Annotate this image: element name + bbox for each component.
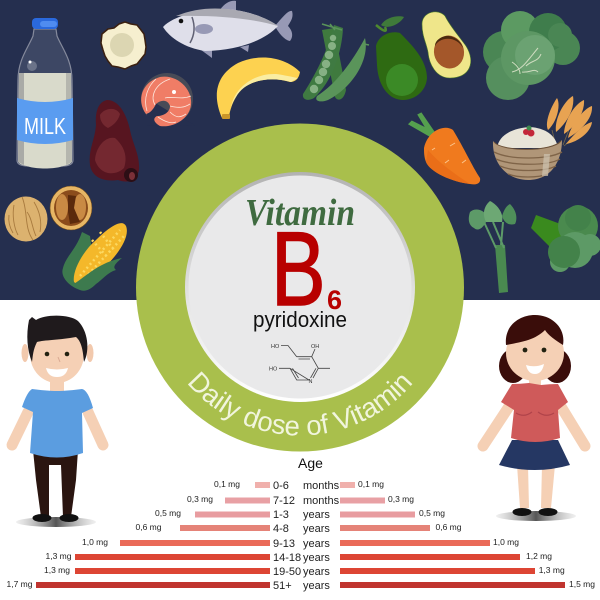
age labels <box>273 480 340 592</box>
icon: celery <box>469 201 516 293</box>
female dose labels: 1,0 mg <box>493 537 519 547</box>
icon: bowl and wheat <box>493 96 592 180</box>
male dose labels <box>6 479 240 589</box>
title: subscript 6: 6 <box>327 285 342 315</box>
age labels: 19-50 <box>273 566 301 578</box>
age labels: years <box>303 523 330 535</box>
icon: cabbage <box>483 11 580 100</box>
female dose labels: 1,2 mg <box>526 551 552 561</box>
panel: navy food background <box>0 0 600 300</box>
icon: fish <box>163 1 293 58</box>
female dose labels <box>358 479 595 589</box>
chart: molecule structure: OH <box>311 344 319 350</box>
title: B: B <box>271 210 326 327</box>
chart: molecule structure: HO <box>269 366 278 372</box>
male dose labels: 1,3 mg <box>44 565 70 575</box>
age labels: years <box>303 538 330 550</box>
icon: liver <box>90 100 139 182</box>
female dose labels: 1,3 mg <box>539 565 565 575</box>
icon: banana <box>217 57 300 119</box>
figure: man <box>12 316 103 527</box>
female bars <box>340 482 565 588</box>
age labels: 7-12 <box>273 495 295 507</box>
age labels: years <box>303 552 330 564</box>
male dose labels: 0,5 mg <box>155 508 181 518</box>
chart: molecule structure <box>269 344 330 385</box>
text: pyridoxine: pyridoxine <box>253 307 347 332</box>
age labels: years <box>303 580 330 592</box>
green ring <box>136 124 464 452</box>
inner disc <box>185 172 415 402</box>
chart: daily dose bars by age <box>6 455 595 592</box>
age labels: years <box>303 566 330 578</box>
age labels: 4-8 <box>273 523 289 535</box>
chart: molecule structure: N <box>308 379 312 385</box>
chart: molecule structure: HO <box>271 344 280 350</box>
age labels: 51+ <box>273 580 292 592</box>
female dose labels: 0,6 mg <box>436 522 462 532</box>
icon: milk bottle <box>17 18 73 168</box>
heading: age: Age <box>298 455 323 471</box>
female dose labels: 0,5 mg <box>419 508 445 518</box>
male dose labels: 0,1 mg <box>214 479 240 489</box>
male dose labels: 0,6 mg <box>136 522 162 532</box>
title: Vitamin: Vitamin <box>245 192 355 234</box>
age labels: 0-6 <box>273 480 289 492</box>
female dose labels: 0,3 mg <box>388 494 414 504</box>
icon: corn <box>62 223 127 291</box>
icon: peas <box>303 24 369 101</box>
figure: woman <box>483 315 585 521</box>
icon: avocado whole <box>376 16 427 100</box>
age labels: 1-3 <box>273 509 289 521</box>
icon: avocado half <box>422 12 471 78</box>
icon: carrot <box>410 114 480 184</box>
icon: salmon steak <box>141 73 195 127</box>
age labels: months <box>303 495 340 507</box>
icon: broccoli <box>531 205 600 272</box>
male bars <box>36 482 270 588</box>
icon: milk bottle: MILK <box>24 113 67 139</box>
age labels: months <box>303 480 340 492</box>
heading: daily dose on ring: Daily dose of Vitamin <box>188 371 412 436</box>
female dose labels: 0,1 mg <box>358 479 384 489</box>
icon: oyster <box>101 22 146 69</box>
panel: vitamin circle <box>136 124 464 452</box>
age labels: years <box>303 509 330 521</box>
male dose labels: 1,7 mg <box>6 579 33 589</box>
icon: walnuts <box>4 186 92 242</box>
male dose labels: 1,3 mg <box>46 551 72 561</box>
age labels: 9-13 <box>273 538 295 550</box>
female dose labels: 1,5 mg <box>569 579 595 589</box>
age labels: 14-18 <box>273 552 301 564</box>
male dose labels: 1,0 mg <box>82 537 108 547</box>
male dose labels: 0,3 mg <box>187 494 213 504</box>
